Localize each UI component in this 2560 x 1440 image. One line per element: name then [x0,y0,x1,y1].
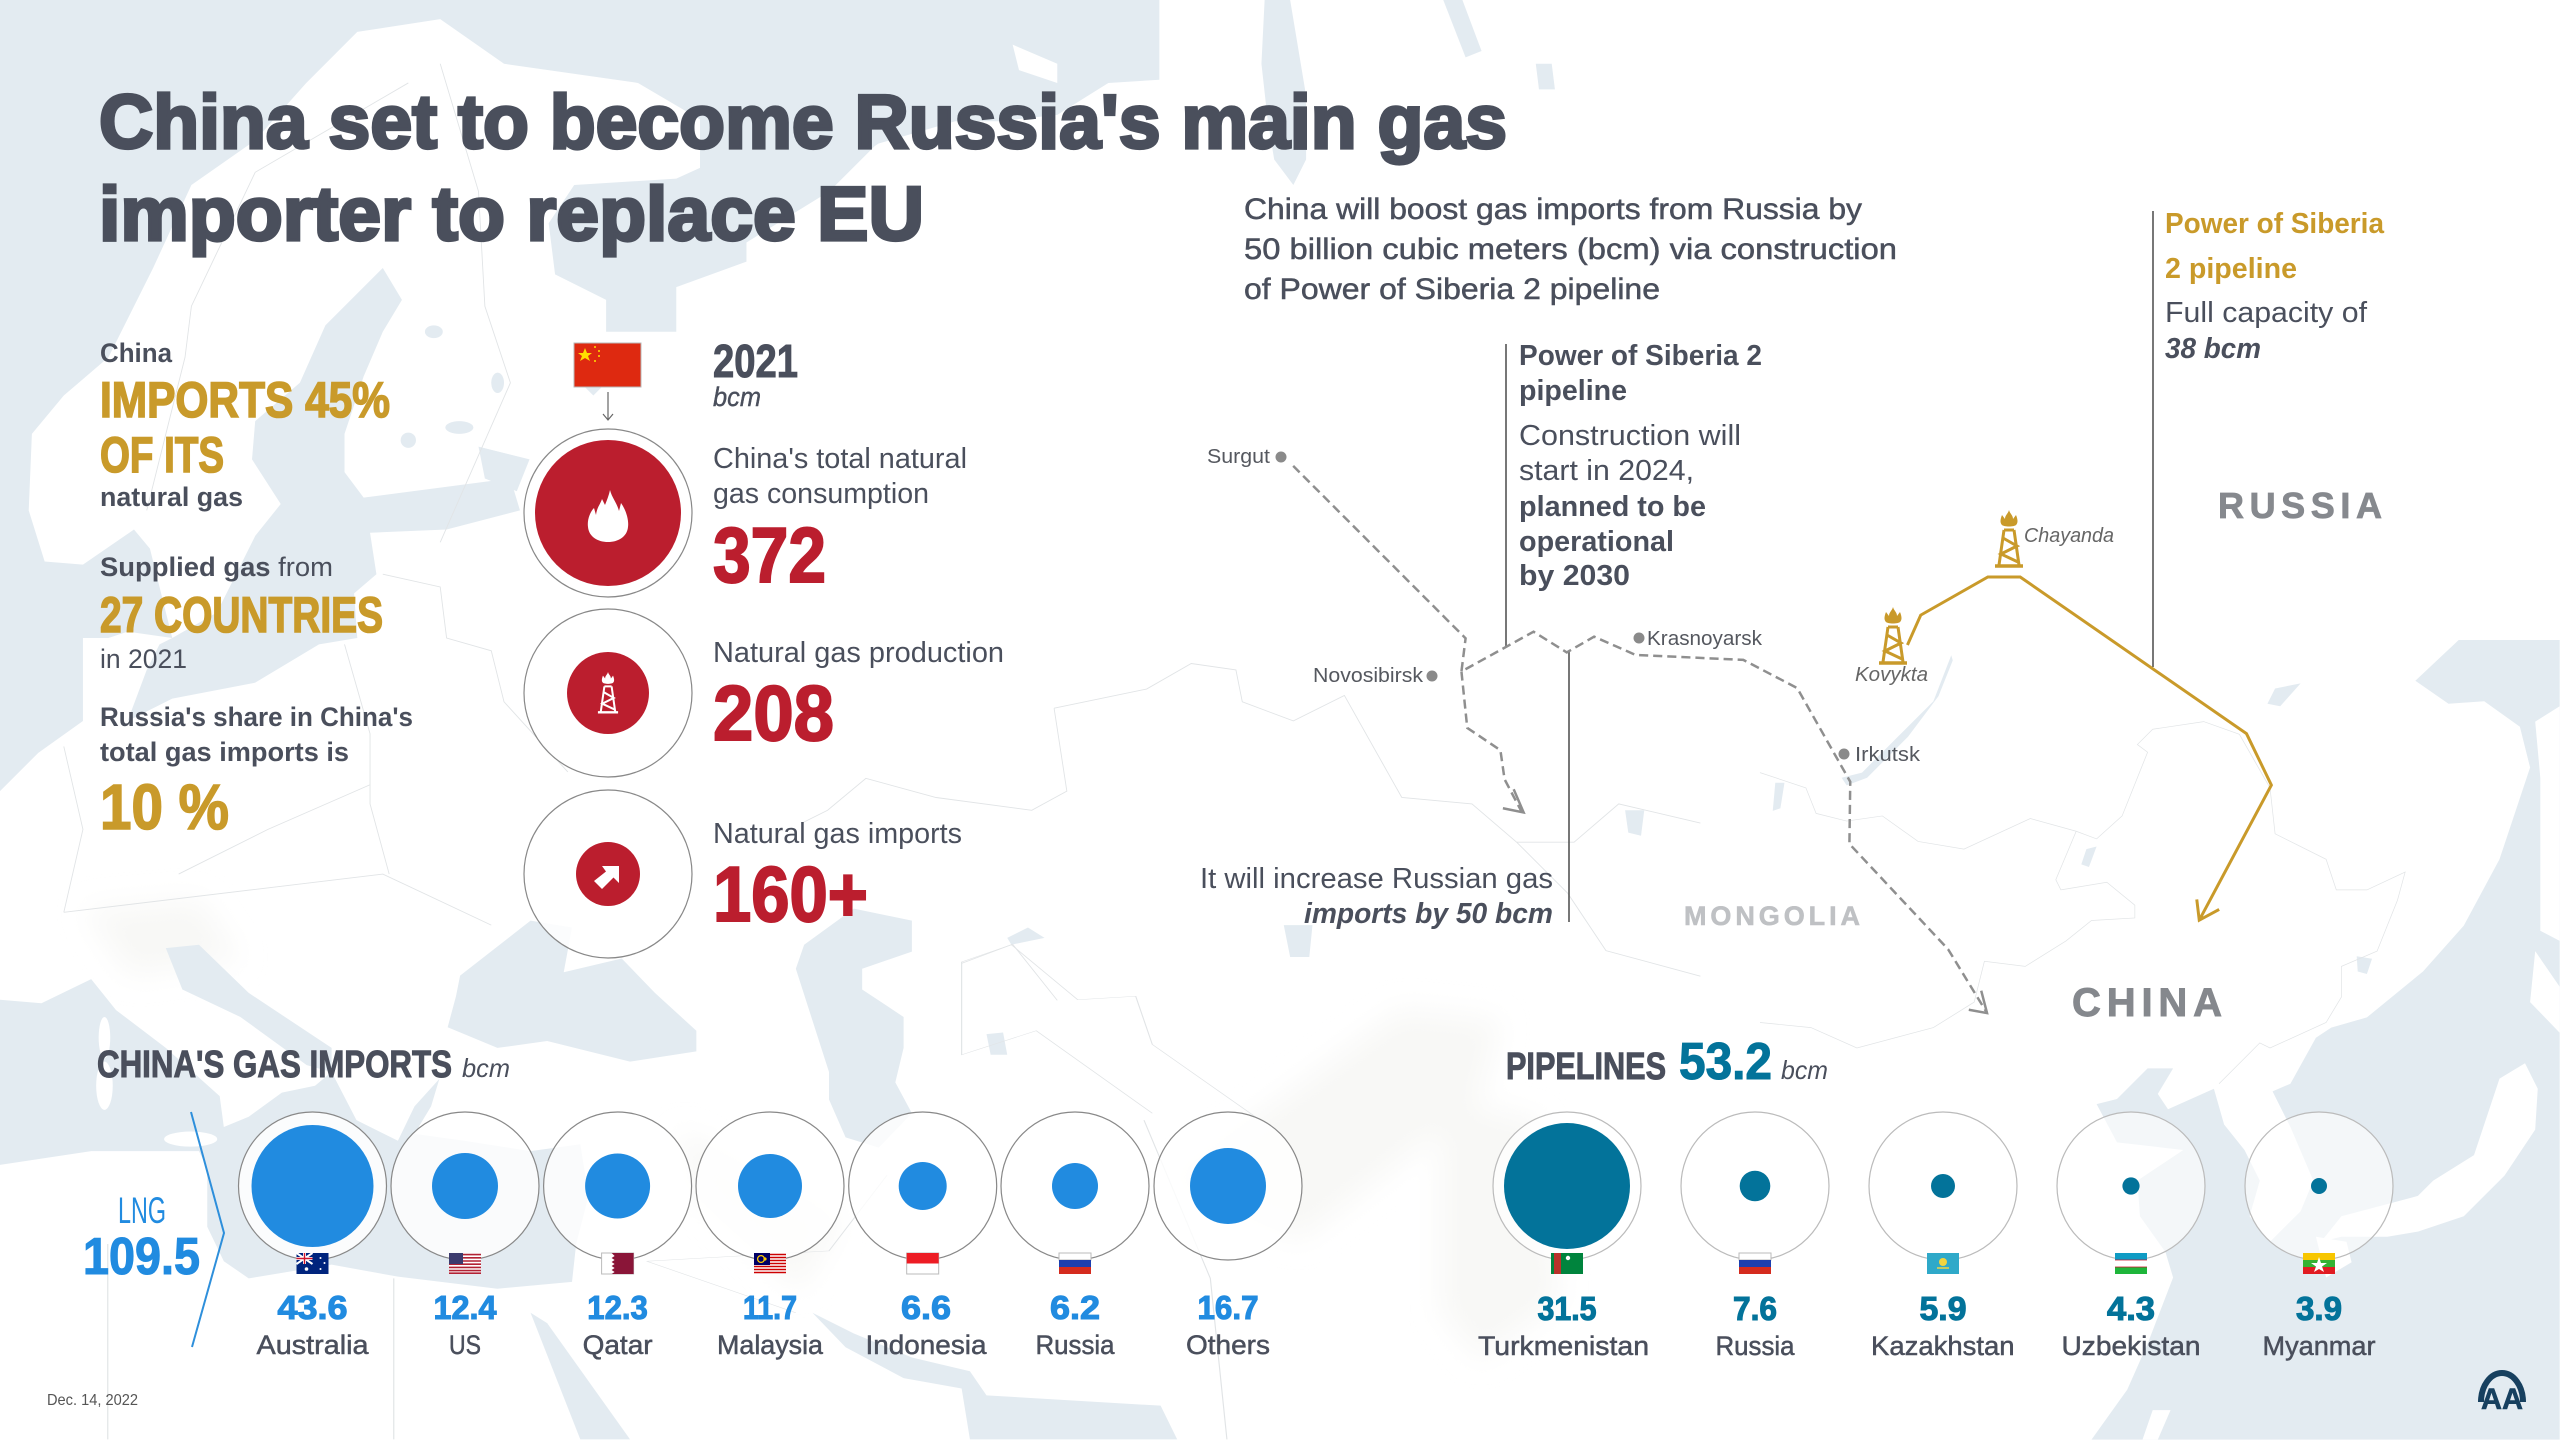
panel: imports: 160+ [713,850,868,938]
city markers: Surgut [1207,446,1270,468]
city markers [1207,446,2114,766]
panel: consumption: gas consumption [713,478,929,510]
callout: Power of Siberia 2 construction: pipeline [1519,375,1627,407]
pipeline item: Uzbekistan: 4.3 [2107,1290,2155,1327]
LNG item: Qatar: Qatar [583,1330,653,1360]
Power of Siberia 2 pipeline route [1907,577,2271,920]
panel: imports: Natural gas imports [713,818,962,850]
callout: capacity: Power of Siberia [2165,208,2385,240]
LNG item: Others: 16.7 [1198,1289,1258,1326]
year heading: bcm [713,382,761,412]
icon: China flag with arrow [574,343,641,420]
heading: pipelines [1506,1033,1828,1091]
left column: key facts: in 2021 [100,644,187,674]
left column: key facts: China [100,338,173,368]
panel: consumption: 372 [713,511,826,599]
callout: capacity [2153,208,2385,667]
LNG item: Qatar [544,1112,692,1360]
left column: key facts: OF ITS [100,427,224,483]
left column: key facts: Supplied gas from [100,552,333,582]
left column: key facts: Russia's share in China's [100,702,413,732]
heading: China's gas imports: CHINA'S GAS IMPORTS [97,1044,452,1086]
logo: AA: AA [2481,1383,2523,1416]
LNG item: Indonesia [849,1112,997,1360]
icon: Kovykta gas derrick [1879,607,1907,663]
title: China set to become Russia's main gas [99,80,1507,165]
pipeline item: Russia: 7.6 [1733,1290,1777,1327]
pipeline item: Kazakhstan [1869,1112,2017,1361]
LNG item: Malaysia [696,1112,844,1360]
LNG item: US: 12.4 [434,1289,497,1326]
heading: China's gas imports: bcm [462,1053,510,1083]
left column: key facts: total gas imports is [100,737,349,767]
pipeline item: Kazakhstan: 5.9 [1920,1290,1966,1327]
icon: Chayanda gas derrick [1995,510,2023,566]
LNG item: Russia [1001,1112,1149,1360]
callout: Power of Siberia 2 construction: by 2030 [1519,560,1630,592]
pipeline item: Turkmenistan [1478,1112,1649,1361]
LNG total with bracket: LNG [118,1190,166,1231]
city markers: Kovykta [1855,664,1928,686]
title [99,80,1507,257]
panel: production: Natural gas production [713,637,1004,669]
LNG item: US: US [449,1330,481,1360]
country labels: RUSSIA [2218,485,2382,526]
pipeline item: Kazakhstan: Kazakhstan [1871,1331,2014,1361]
panel: production [524,609,1004,777]
left column: key facts [100,338,413,843]
callout: Power of Siberia 2 construction: Construction will [1519,420,1741,452]
left column: key facts: 10 % [100,771,229,843]
LNG item: Australia [238,1112,386,1360]
heading: pipelines: 53.2 [1679,1033,1772,1091]
city markers: Chayanda [2024,525,2114,547]
LNG item: Indonesia: 6.6 [901,1289,951,1326]
city markers: Novosibirsk [1313,665,1424,687]
city markers: Irkutsk [1855,744,1921,766]
callout: Power of Siberia 2 construction: planned to be [1519,491,1706,523]
LNG item: Australia: 43.6 [278,1289,348,1326]
panel: consumption: China's total natural [713,443,967,475]
title: importer to replace EU [99,172,924,257]
LNG item: Russia: Russia [1036,1330,1115,1360]
intro text: of Power of Siberia 2 pipeline [1244,273,1660,306]
LNG item: Others: Others [1186,1330,1270,1360]
callout: Power of Siberia 2 construction: operational [1519,526,1674,558]
left column: key facts: IMPORTS 45% [100,372,390,428]
left column: key facts: natural gas [100,482,243,512]
LNG total with bracket [83,1112,224,1347]
pipeline item: Myanmar [2245,1112,2393,1361]
intro text: 50 billion cubic meters (bcm) via construction [1244,233,1897,266]
pipeline item: Turkmenistan: 31.5 [1538,1290,1596,1327]
country labels [1684,485,2382,1025]
LNG item: Qatar: 12.3 [587,1289,648,1326]
pipeline item: Myanmar: Myanmar [2262,1331,2376,1361]
pipeline item: Turkmenistan: Turkmenistan [1478,1331,1649,1361]
left column: key facts: 27 COUNTRIES [100,587,383,643]
panel: consumption [524,429,967,599]
pipeline item: Russia [1681,1112,1829,1361]
callout: capacity: Full capacity of [2165,297,2368,329]
LNG item: Indonesia: Indonesia [866,1330,988,1360]
pipeline item: Myanmar: 3.9 [2296,1290,2342,1327]
LNG item: Malaysia: 11.7 [743,1289,797,1326]
heading: pipelines: bcm [1781,1055,1828,1085]
LNG item: Malaysia: Malaysia [717,1330,824,1360]
callout: capacity: 2 pipeline [2165,253,2297,285]
year heading [713,335,798,412]
callout: Power of Siberia 2 construction [1506,340,1762,647]
LNG item: Australia: Australia [256,1330,370,1360]
panel: imports [524,790,962,958]
intro text [1244,193,1897,306]
dashed planned pipeline with arrows [1293,466,1987,1013]
pipeline item: Uzbekistan: Uzbekistan [2062,1331,2200,1361]
callout: Power of Siberia 2 construction: Power of Siberia 2 [1519,340,1762,372]
intro text: China will boost gas imports from Russia by [1244,193,1862,226]
date: Dec. 14, 2022 [47,1392,138,1409]
pipeline item: Russia: Russia [1716,1331,1795,1361]
callout: increase in imports [1200,651,1569,930]
country labels: MONGOLIA [1684,901,1860,931]
pipeline item: Uzbekistan [2057,1112,2205,1361]
city markers: Krasnoyarsk [1647,628,1763,650]
callout: increase in imports: It will increase Russian gas [1200,863,1553,895]
callout: increase in imports: imports by 50 bcm [1304,898,1553,930]
year heading: 2021 [713,335,798,387]
callout: Power of Siberia 2 construction: start in 2024, [1519,455,1694,487]
LNG item: Russia: 6.2 [1050,1289,1100,1326]
LNG item: US [391,1112,539,1360]
panel: production: 208 [713,669,834,757]
heading: pipelines: PIPELINES [1506,1046,1666,1088]
callout: capacity: 38 bcm [2165,333,2261,365]
LNG item: Others [1154,1112,1302,1360]
LNG total with bracket: 109.5 [83,1228,200,1286]
country labels: CHINA [2072,981,2222,1025]
